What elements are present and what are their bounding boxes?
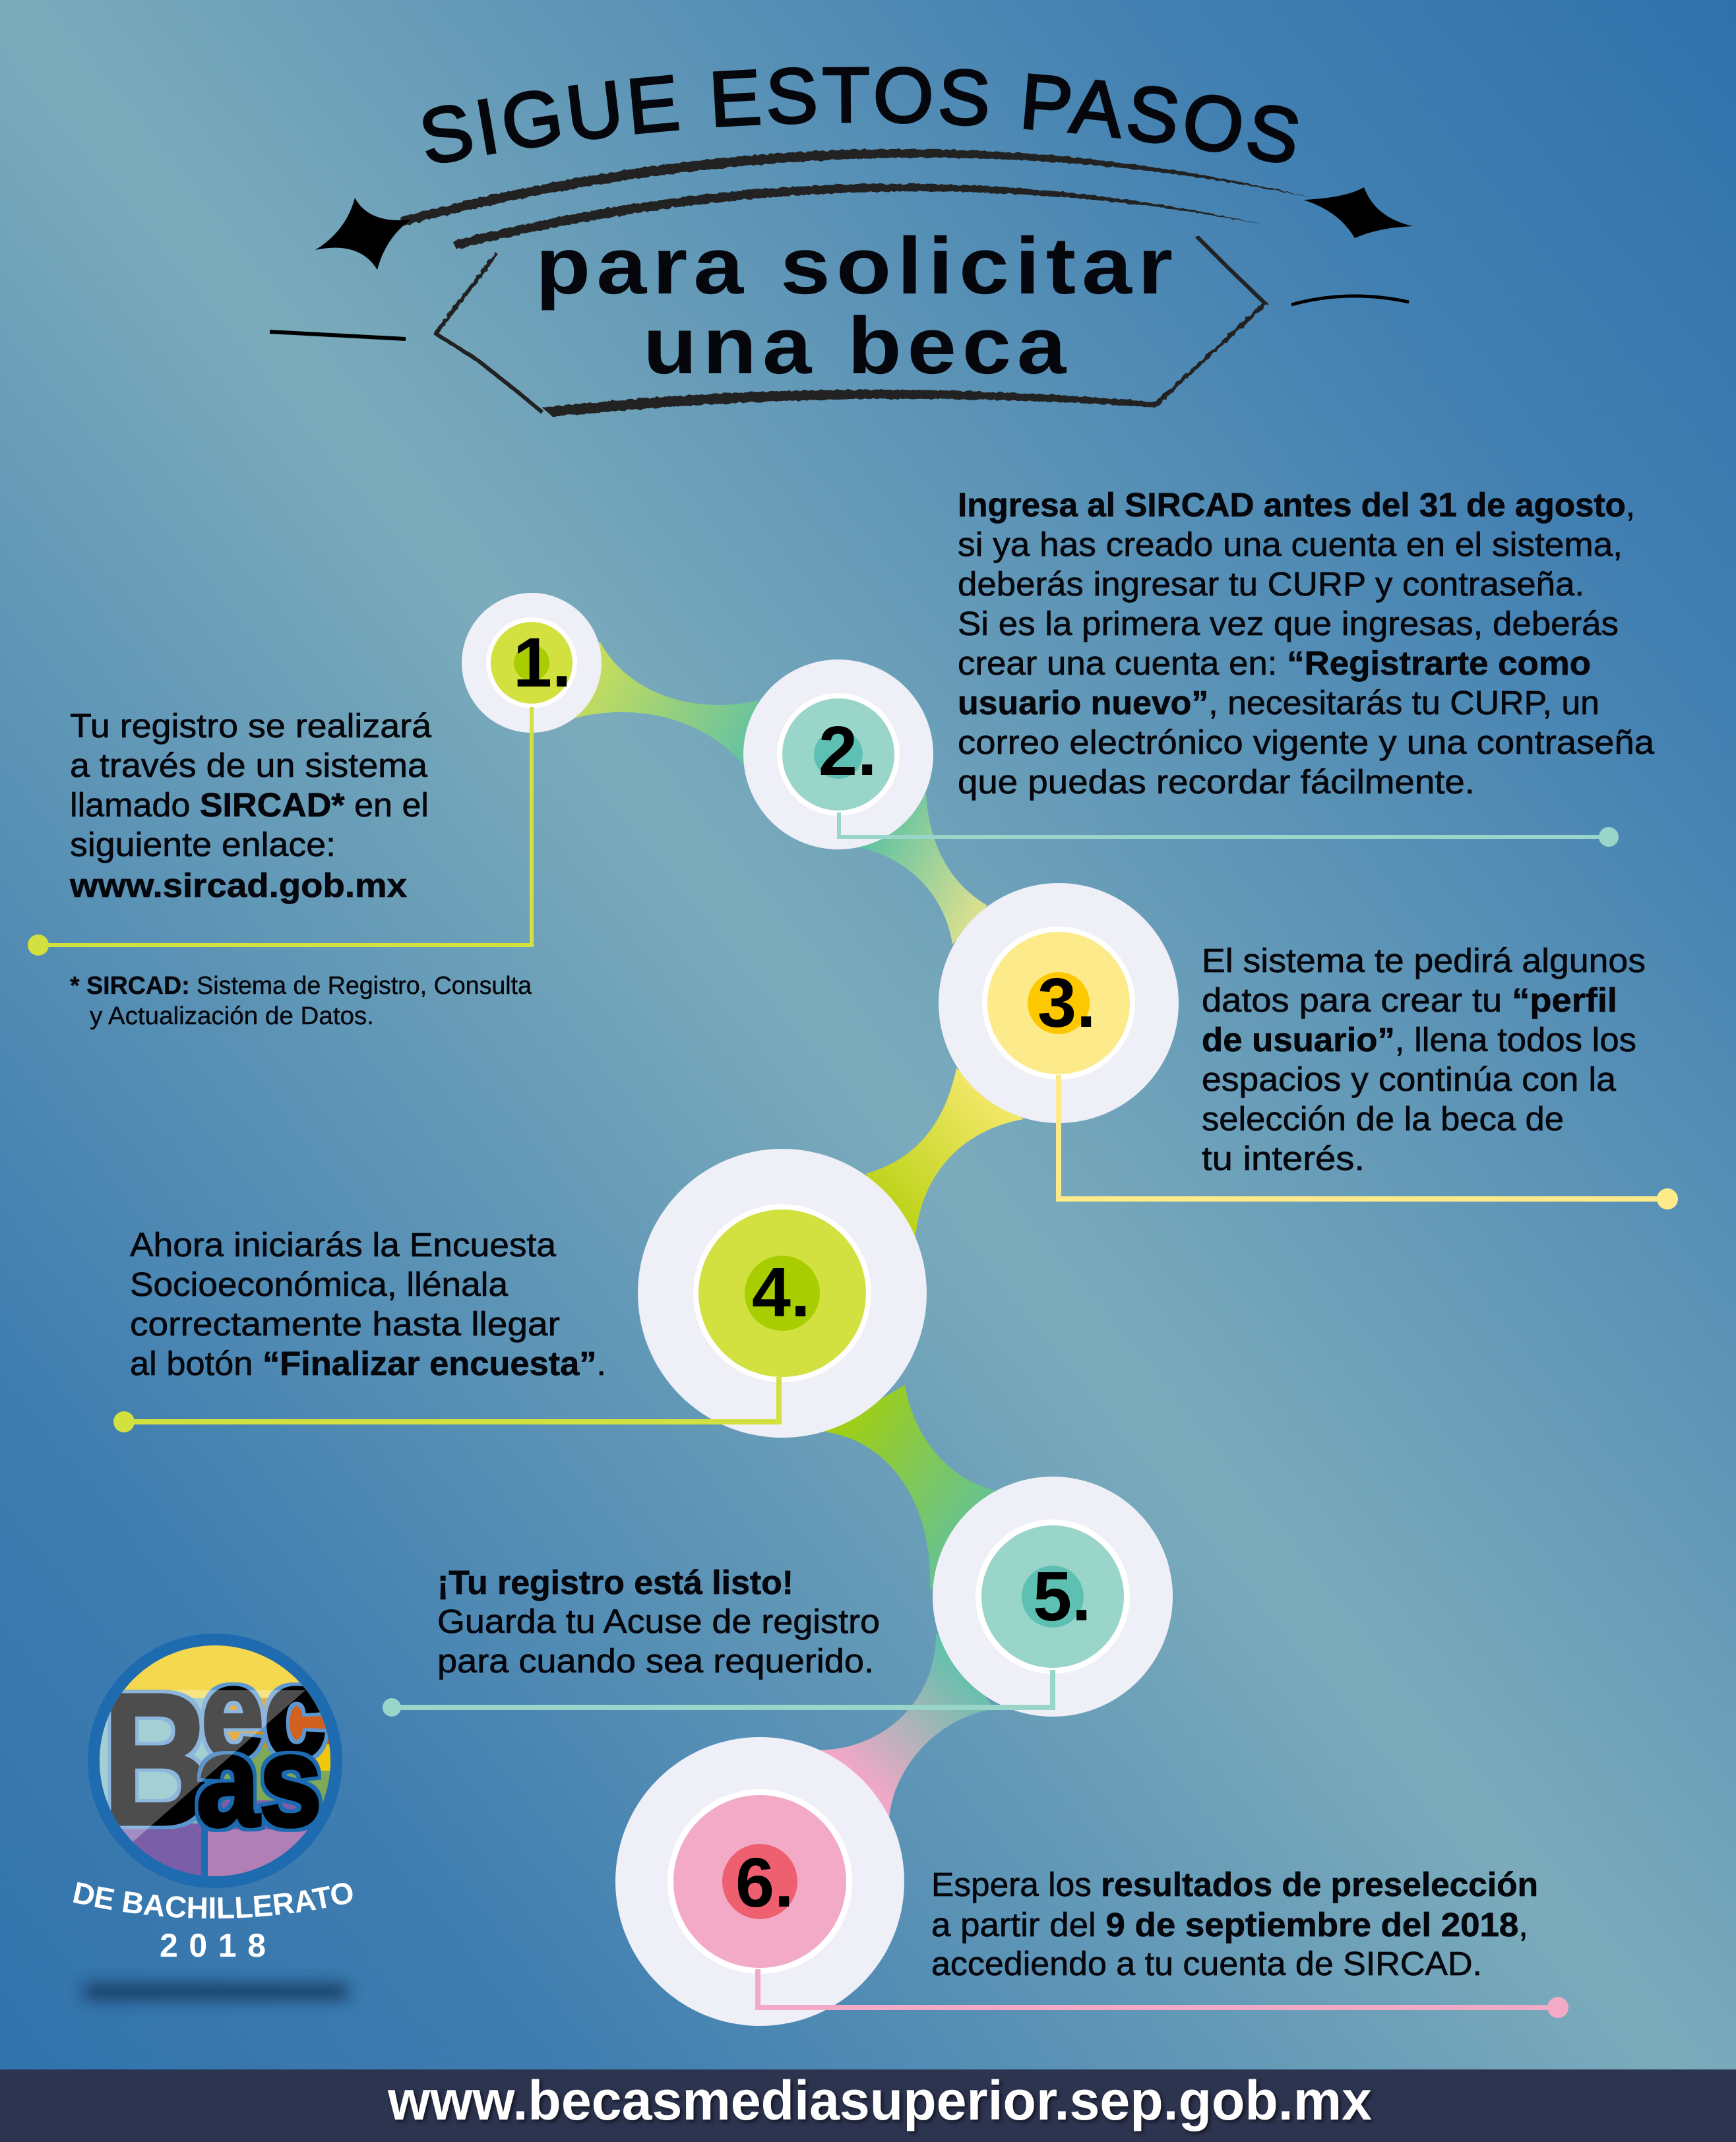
footnote [70, 972, 532, 1030]
logo letters ec: ec [201, 1641, 326, 1785]
number 1: 1. [513, 624, 571, 702]
heading: una beca: una beca [643, 301, 1072, 390]
connector 1 to 2 [572, 641, 759, 768]
leader line 1 [28, 707, 532, 956]
number 6: 6. [735, 1844, 793, 1922]
text: step 4: Socioeconómica, llénala [130, 1266, 509, 1303]
logo: becas de bachillerato 2018 [73, 1634, 356, 2009]
text: step 4: Ahora iniciarás la Encuesta [130, 1226, 557, 1264]
logo letter B: B [102, 1655, 211, 1864]
footer bar [0, 2069, 1736, 2142]
text: step 2: deberás ingresar tu CURP y contraseña. [958, 565, 1584, 603]
leader line 4 [113, 1377, 779, 1432]
leader line 5 [383, 1670, 1053, 1717]
text: step 3: datos para crear tu “perfil [1202, 981, 1617, 1019]
step 4 [113, 1149, 927, 1438]
footnote: y Actualización de Datos. [90, 1002, 374, 1030]
text: step 3 [1202, 942, 1646, 1177]
text: step 4: correctamente hasta llegar [130, 1305, 560, 1343]
text: step 2 [958, 486, 1655, 801]
connectors between step circles [572, 641, 1024, 1818]
step 3 [939, 883, 1678, 1209]
text: step 2: correo electrónico vigente y una contraseña [958, 723, 1655, 761]
connector 5 to 6 [821, 1633, 995, 1818]
leader line 3 [1059, 1075, 1678, 1209]
circle badge 5 [933, 1477, 1173, 1717]
number 2: 2. [819, 712, 877, 790]
text: step 3: de usuario”, llena todos los [1202, 1021, 1636, 1058]
text: step 1: llamado SIRCAD* en el [70, 786, 429, 824]
logo year: 2018 [160, 1927, 266, 1964]
heading: para solicitar: para solicitar [536, 221, 1179, 311]
text: step 1: Tu registro se realizará [70, 707, 432, 745]
leader line 2 [839, 812, 1619, 847]
text: step 5: para cuando sea requerido. [437, 1642, 874, 1680]
text: step 2: si ya has creado una cuenta en el sistema, [958, 526, 1623, 563]
heading: sigue estos pasos: SIGUE ESTOS PASOS [423, 67, 1298, 164]
number 3: 3. [1038, 964, 1096, 1042]
left short line [270, 332, 406, 339]
text: step 3: El sistema te pedirá algunos [1202, 942, 1646, 979]
number 5: 5. [1033, 1558, 1091, 1636]
text: step 5 [437, 1564, 880, 1680]
connector 2 to 3 [859, 793, 987, 944]
heading arch lines [400, 149, 1313, 417]
logo shadow [82, 1984, 350, 2000]
circle badge 4 [638, 1149, 927, 1438]
text: step 4: al botón “Finalizar encuesta” . [130, 1345, 606, 1382]
text: step 1 [69, 707, 432, 904]
circle badge 6 [615, 1737, 904, 2026]
text: step 2: usuario nuevo”, necesitarás tu CURP, un [958, 684, 1599, 721]
footnote: * SIRCAD: Sistema de Registro, Consulta [70, 972, 532, 1000]
footer url: www.becasmediasuperior.sep.gob.mx [387, 2069, 1372, 2131]
number 4: 4. [752, 1254, 810, 1331]
logo badge [66, 1634, 342, 1893]
text: step 2: que puedas recordar fácilmente. [958, 763, 1475, 801]
text: step 6: Espera los resultados de preselección [931, 1866, 1538, 1903]
text: step 2: Si es la primera vez que ingresas, deberás [958, 605, 1619, 642]
text: step 1: a través de un sistema [70, 747, 428, 784]
text: step 3: espacios y continúa con la [1202, 1060, 1617, 1098]
text: step 3: tu interés. [1202, 1140, 1365, 1177]
step 5 [383, 1477, 1173, 1717]
text: step 6: a partir del 9 de septiembre del 2018 , [931, 1906, 1528, 1943]
text: step 4 [130, 1226, 606, 1382]
text: step 5: ¡Tu registro está listo! [437, 1564, 793, 1601]
step 1 [28, 593, 602, 1030]
icon: right star [1303, 187, 1413, 238]
logo letters as: as [197, 1709, 322, 1853]
title [270, 51, 1413, 417]
logo curved label: DE BACHILLERATO [73, 1882, 352, 1918]
text: step 3: selección de la beca de [1202, 1100, 1564, 1138]
text: step 2: crear una cuenta en: “Registrarte como [958, 644, 1591, 682]
step 6 [615, 1737, 1568, 2026]
text: step 1: www.sircad.gob.mx [69, 867, 407, 904]
text: step 2: Ingresa al SIRCAD antes del 31 de agosto, [958, 486, 1635, 524]
circle badge 1 [462, 593, 602, 733]
connector 3 to 4 [865, 1068, 1024, 1238]
step 2 [743, 486, 1655, 849]
leader line 6 [758, 1969, 1568, 2018]
right short line [1291, 296, 1409, 305]
text: step 5: Guarda tu Acuse de registro [437, 1603, 880, 1640]
connector 4 to 5 [824, 1385, 995, 1591]
text: step 6: accediendo a tu cuenta de SIRCAD. [931, 1945, 1482, 1982]
text: step 1: siguiente enlace: [70, 826, 336, 863]
icon: left star [315, 198, 411, 270]
text: step 6 [931, 1866, 1538, 1982]
circle badge 3 [939, 883, 1179, 1123]
circle badge 2 [743, 659, 933, 849]
